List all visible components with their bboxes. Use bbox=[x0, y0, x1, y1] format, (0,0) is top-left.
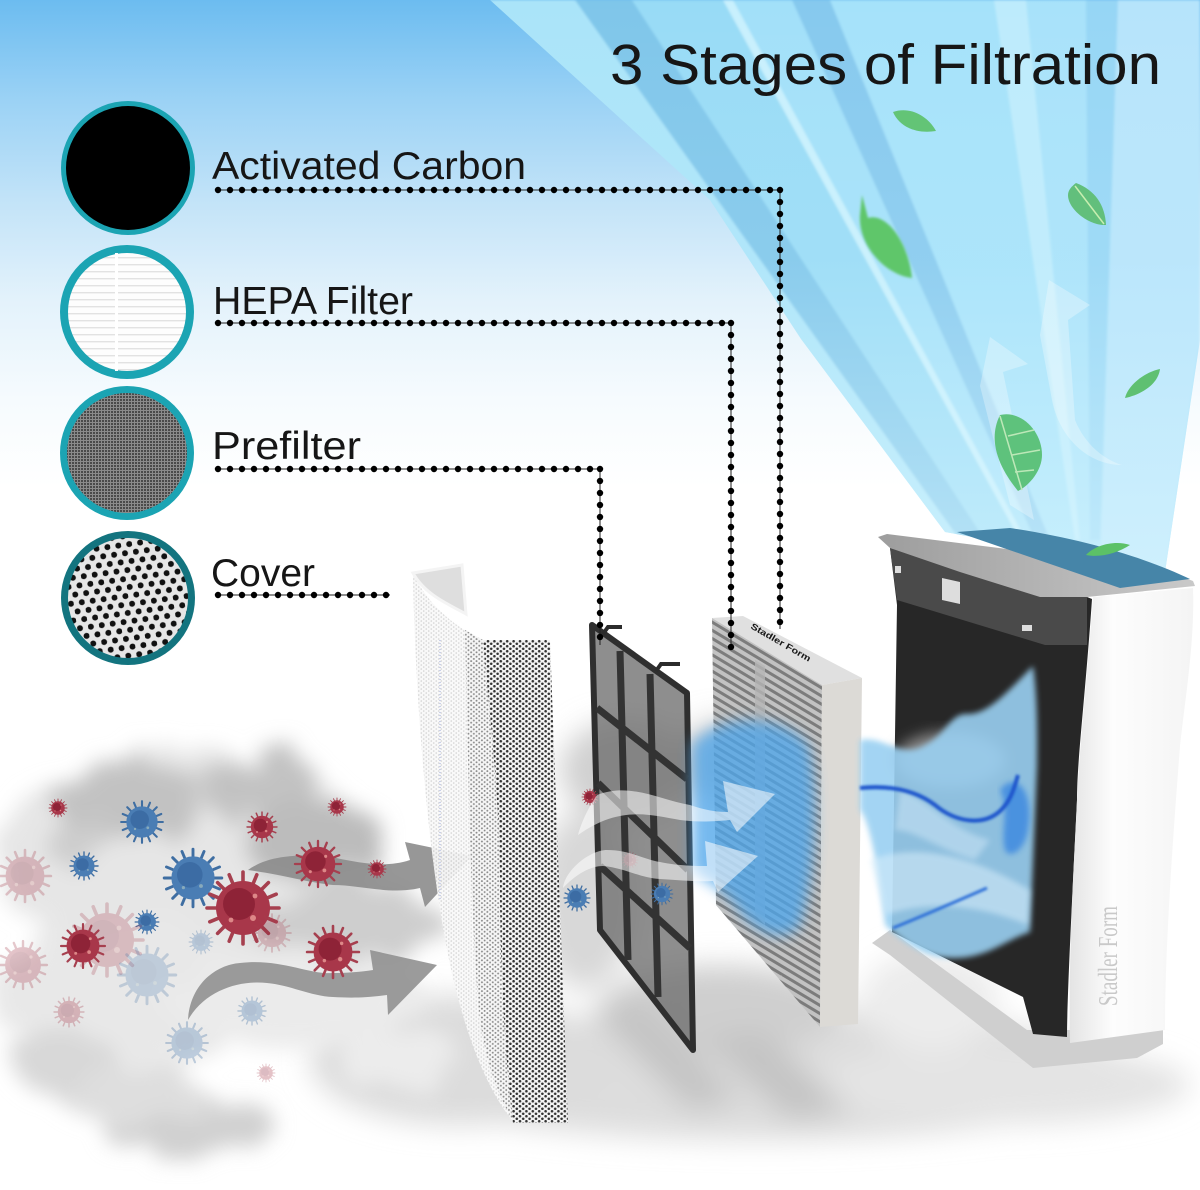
rising air arrows bbox=[980, 280, 1122, 520]
arrow: dirty air lower bbox=[188, 950, 437, 1020]
blue clean air through filter bbox=[692, 721, 815, 935]
arrow: filtered air lower bbox=[563, 841, 758, 892]
arrow: filtered air upper bbox=[578, 781, 775, 835]
brand text: Stadler Form bbox=[1093, 906, 1123, 1006]
prefilter panel bbox=[592, 625, 693, 1050]
air purifier bbox=[872, 528, 1195, 1068]
connector: HEPA bbox=[218, 323, 731, 650]
icon: leaves bbox=[860, 110, 1160, 491]
swatch: cover bbox=[61, 531, 195, 665]
small clips bbox=[895, 566, 1032, 631]
upper frame bbox=[890, 548, 1087, 645]
arrow: dirty air upper bbox=[248, 842, 472, 907]
label: cover: Cover bbox=[211, 552, 315, 595]
clean air streams bbox=[480, 0, 1200, 580]
label: HEPA filter: HEPA Filter bbox=[213, 280, 413, 323]
HEPA filter panel bbox=[712, 616, 862, 1027]
swatch: prefilter bbox=[60, 386, 194, 520]
blue air inside purifier bbox=[860, 666, 1037, 958]
glass opening bbox=[957, 528, 1190, 588]
interior bbox=[890, 548, 1092, 1037]
small viruses at filter bbox=[564, 789, 673, 911]
swatch: activated carbon bbox=[61, 101, 195, 235]
connector: activated carbon bbox=[218, 190, 780, 629]
smoke cloud bbox=[0, 750, 460, 1160]
base bbox=[872, 930, 1163, 1068]
body white shell bbox=[1070, 588, 1193, 1043]
connector: cover bbox=[218, 594, 390, 596]
swatch: HEPA filter bbox=[60, 245, 194, 379]
HEPA brand print: Stadler Form bbox=[749, 622, 812, 664]
connector: prefilter bbox=[218, 469, 600, 645]
floor smoke bbox=[310, 720, 1190, 1140]
label: prefilter: Prefilter bbox=[212, 425, 361, 468]
leaf in glass bbox=[1086, 543, 1130, 556]
lid bbox=[878, 534, 1195, 597]
cover panel bbox=[413, 565, 568, 1123]
label: activated carbon: Activated Carbon bbox=[212, 145, 526, 188]
title: 3 Stages of Filtration bbox=[610, 33, 1161, 97]
viruses bbox=[0, 798, 386, 1082]
